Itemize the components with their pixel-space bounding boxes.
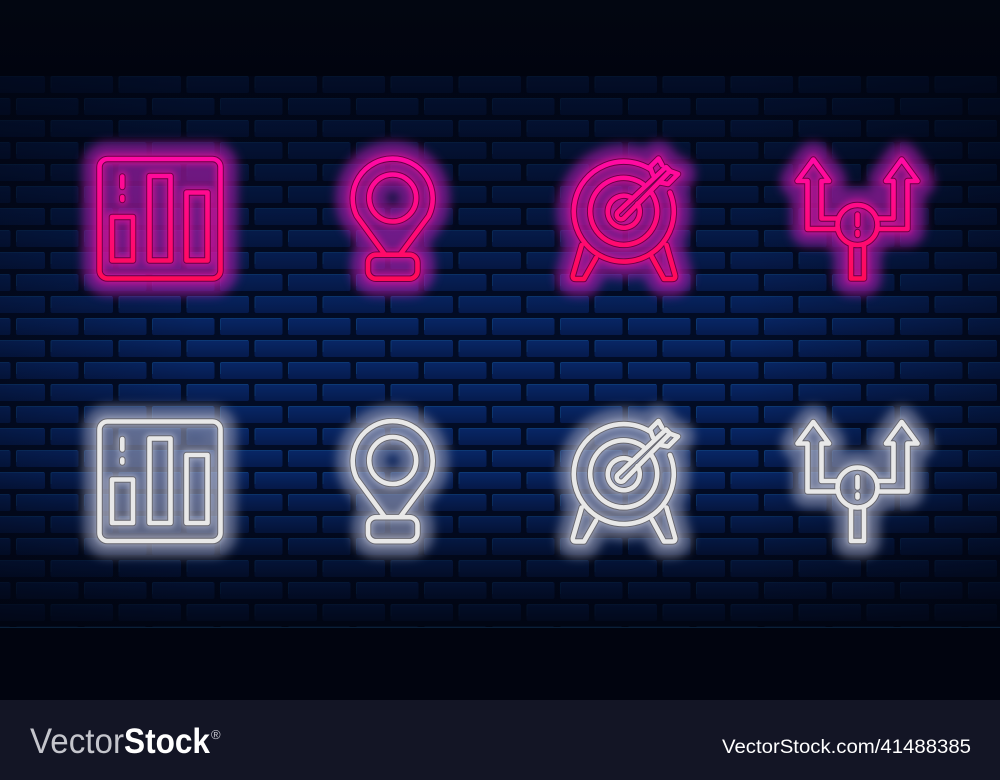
footer bar <box>0 700 1000 780</box>
icon: pink neon target with arrow <box>573 158 678 279</box>
icon: pink neon forked arrows with exclamation mark <box>798 160 918 278</box>
logo: VectorStock <box>30 722 221 761</box>
icon: pink neon map pin <box>353 159 433 279</box>
icon: white neon forked arrows with exclamation mark <box>798 422 918 541</box>
icon: white neon map pin <box>353 421 433 541</box>
image id text: VectorStock.com/41488385 <box>722 737 971 758</box>
logo: VectorStock: Vector <box>30 722 124 761</box>
icon: pink neon bar chart with exclamation mark <box>100 159 220 278</box>
icon: white neon target with arrow <box>573 421 678 542</box>
logo: VectorStock: ® <box>211 727 221 742</box>
icon: white neon bar chart with exclamation mark <box>100 422 220 541</box>
brick wall <box>0 76 1000 628</box>
logo: VectorStock: Stock <box>124 722 210 761</box>
